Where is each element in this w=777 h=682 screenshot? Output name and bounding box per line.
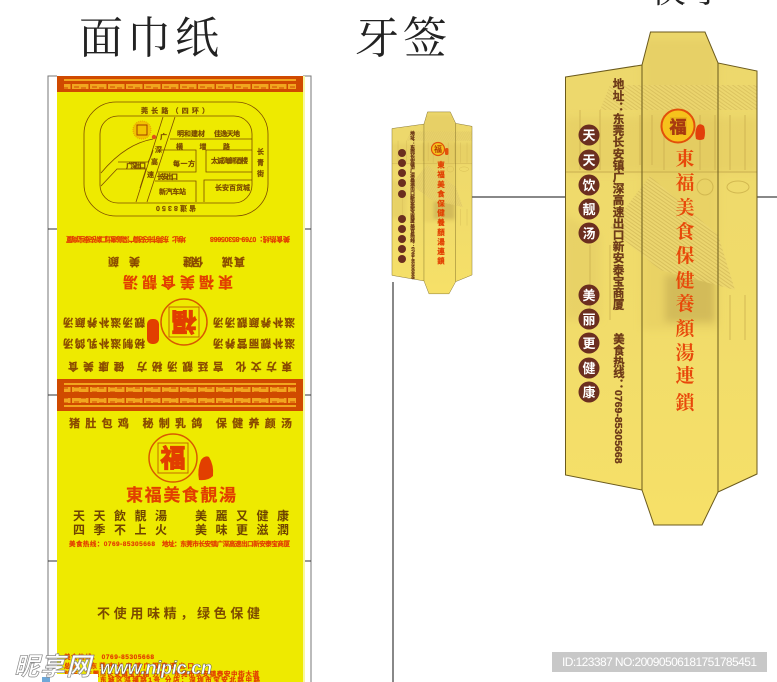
inverted contact line: 美食热线：0769-85305668 (210, 235, 290, 244)
inverted slogan: three pairs: 真诚 (222, 255, 245, 269)
branch addresses: 总店：东莞市长安镇广深高速出口 (64, 661, 194, 670)
couplets: 四季不上火 (73, 522, 167, 537)
inverted contact line (66, 235, 290, 244)
map: 横增路 (176, 142, 230, 151)
map: 长 (257, 147, 264, 156)
sleeve brand text: 鎖 (675, 392, 695, 414)
slogan beads: first couplet: 天 (582, 153, 596, 168)
inverted product lines: 東方文化 宫廷靓汤秘方 健康美食 (68, 360, 292, 373)
inverted product lines: 滋补养颜靓汤汤 (213, 316, 295, 329)
watermark: www.nipic.cn (100, 658, 212, 678)
inverted product lines: 靓汤滋补养颜汤 (63, 316, 145, 329)
sleeve logo and seal (662, 110, 705, 142)
branch addresses: 总店：东莞市长安镇宝业路 分店：东莞市长安镇泰安中街大道 (64, 669, 260, 678)
inverted product lines: 滋补靓丽营养汤 (213, 337, 295, 350)
map: 广深出口 (126, 161, 146, 170)
sleeve brand text (675, 147, 695, 414)
map: 长安出口 (157, 172, 178, 181)
inverted slogan: three pairs: 保健 (183, 255, 203, 269)
map: 佳逸天地 (214, 129, 240, 138)
slogan beads: first couplet (578, 124, 600, 244)
toothpick beads (398, 149, 406, 263)
slogan beads: second couplet: 更 (582, 336, 596, 351)
watermark (0, 653, 212, 682)
inverted slogan: three pairs: 美颜 (108, 255, 140, 269)
watermark: 昵享网 (14, 653, 95, 681)
logo and seal (149, 434, 213, 482)
toothpick address text: 地址：东莞长安镇广深高速出口新安泰宝商厦 (410, 130, 416, 223)
top ornamental band (57, 76, 303, 92)
sleeve brand text: 福 (675, 172, 695, 194)
product slogan: 猪肚包鸡 秘制乳鸽 保健养颜汤 (69, 416, 292, 430)
middle ornamental band (57, 379, 303, 411)
sleeve brand text: 保 (675, 245, 695, 267)
toothpick vertical brand text: 東福美食保健養顏湯連鎖 (436, 160, 446, 267)
inverted brand name: 東福美食靚湯 (123, 273, 233, 291)
sleeve brand text: 東 (675, 147, 695, 170)
toothpick logo (432, 142, 448, 156)
map: 莞长路（四环） (141, 106, 209, 115)
sleeve brand text: 顏 (675, 318, 695, 340)
slogan beads: second couplet: 康 (582, 385, 596, 400)
map (84, 102, 268, 216)
couplets: 美麗又健康 (195, 508, 289, 523)
branch addresses: 美食热线： 0769-85305668 (64, 652, 154, 661)
contact line: 地址：东莞市长安镇广深高速出口新安泰宝商厦 (162, 539, 290, 548)
toothpick hotline text: 美食热线：0769-85305668 (410, 223, 416, 280)
toothpick logo: 福 (434, 144, 442, 154)
sleeve brand text: 食 (675, 221, 695, 243)
map: 太诚海鲜酒楼 (211, 156, 248, 165)
inverted product lines: 秘制滋补乳鸽汤 (63, 337, 145, 350)
map: 明和建材 (177, 129, 205, 138)
green slogan: 不使用味精，绿色保健 (97, 606, 260, 621)
couplets (73, 508, 289, 537)
sleeve brand text: 連 (675, 365, 695, 387)
slogan beads: second couplet: 丽 (582, 312, 596, 327)
inverted logo and seal: 福 (171, 307, 197, 335)
title: tissue paper: 面巾纸 (79, 14, 223, 63)
contact line: 美食热线：0769-85305668 (69, 539, 155, 548)
map: 深 (155, 145, 162, 154)
ID stamp: ID:123387 NO:20090506181751785451 (562, 655, 757, 669)
brand name: 東福美食靚湯 (126, 485, 236, 505)
ID stamp (552, 652, 767, 672)
inverted slogan: three pairs (108, 255, 245, 269)
slogan beads: first couplet: 饮 (582, 178, 596, 193)
map: 街 (257, 169, 264, 178)
panel: toothpick sleeve (392, 112, 472, 294)
map: 高 (151, 157, 158, 166)
sleeve logo and seal: 福 (670, 118, 686, 137)
map: 速 (147, 170, 154, 179)
couplets: 美味更滋潤 (195, 522, 289, 537)
couplets: 天天飲靚湯 (73, 508, 167, 523)
sleeve brand text: 養 (675, 293, 695, 315)
inverted product lines (63, 316, 295, 373)
map: 广 (160, 132, 167, 141)
contact line (69, 539, 290, 548)
sleeve brand text: 湯 (675, 342, 695, 364)
map: 新汽车站 (159, 187, 186, 196)
slogan beads: first couplet: 靓 (582, 202, 596, 217)
map: 省道8350 (156, 204, 196, 213)
slogan beads: second couplet (578, 284, 600, 402)
sleeve brand text: 美 (675, 196, 695, 219)
slogan beads: first couplet: 天 (582, 128, 596, 143)
hotline text: 美食热线： 0769-85305668 (612, 332, 625, 464)
address text: 地址：东莞长安镇广深高速出口新安泰宝商厦 (612, 77, 624, 311)
panel: chopstick sleeve (565, 32, 757, 525)
branch addresses (64, 652, 260, 682)
map: 青 (257, 158, 264, 167)
sleeve brand text: 健 (675, 270, 695, 292)
slogan beads: second couplet: 健 (582, 361, 596, 376)
map: 长安百货城 (215, 183, 250, 192)
panel: tissue paper wrapper (57, 76, 305, 682)
inverted logo and seal (147, 299, 207, 345)
map: 每一方 (173, 159, 195, 168)
slogan beads: second couplet: 美 (582, 288, 596, 303)
logo and seal: 福 (160, 445, 186, 473)
inverted contact line: 地址：东莞市长安镇广深高速出口新安泰宝商厦 (66, 235, 186, 244)
title: toothpick: 牙签 (355, 14, 451, 63)
slogan beads: first couplet: 汤 (582, 226, 596, 241)
